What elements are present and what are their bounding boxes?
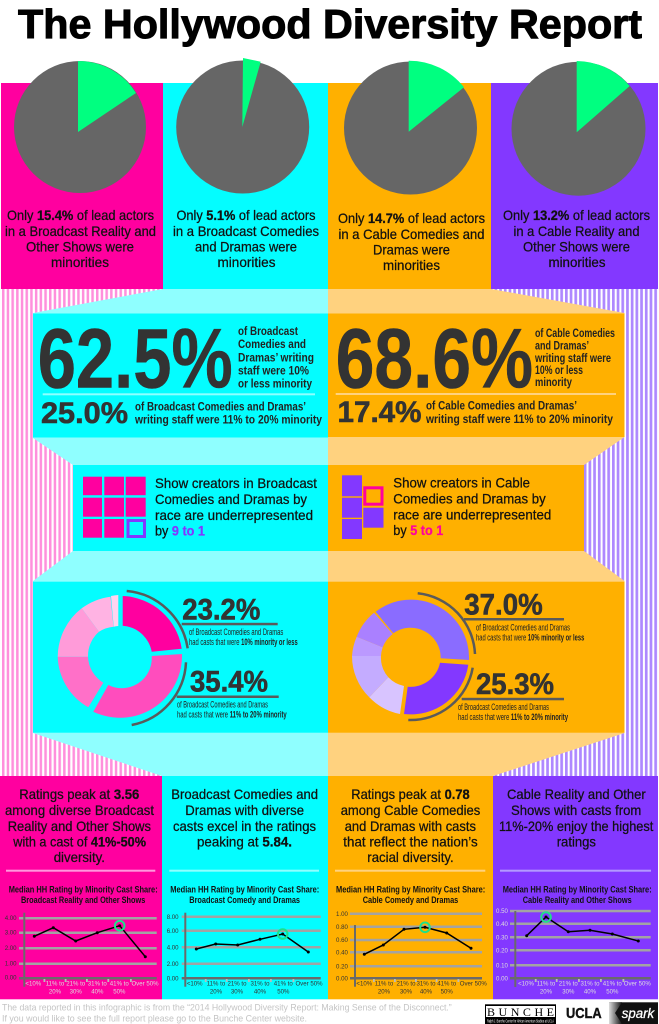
line chart: broadcast reality: 11% to: [46, 980, 65, 988]
text: 68.6% description: minority: [535, 375, 572, 389]
text: ratings summary: Ratings peak at 3.56: [19, 787, 140, 802]
chart title: [336, 884, 485, 905]
panel: Broadcast show creators: [73, 465, 328, 551]
chart title: [9, 884, 158, 905]
line chart: cable reality: 0.20: [496, 948, 508, 954]
text: 62.5% description: [238, 324, 314, 390]
line chart: cable reality: 30%: [562, 988, 575, 996]
striped background: pink: [2, 289, 163, 776]
text: ratings summary: Reality and Other Shows: [8, 819, 151, 834]
line chart: broadcast comedy: 4.00: [167, 944, 179, 952]
line chart: cable comedy: 0.20: [336, 964, 348, 970]
chart title: [170, 884, 319, 905]
line chart: broadcast comedy: 2.00: [167, 961, 179, 968]
text: ratings summary: [5, 787, 154, 865]
title: The Hollywood Diversity Report: [18, 1, 642, 47]
text: ratings summary: Cable Reality and Other: [507, 787, 646, 802]
text: ratings summary: racial diversity.: [367, 850, 454, 865]
line chart: cable comedy: <10%: [356, 980, 373, 988]
text: 17.4% description: writing staff were 11% to 20% minority: [425, 412, 613, 426]
text: 15.4%: Other Shows were: [26, 240, 134, 254]
stat: 17.4%: 17.4%: [338, 396, 422, 429]
text: 13.2%: [503, 208, 650, 270]
line chart: broadcast reality: 21% to: [66, 980, 86, 988]
text: show creators broadcast: Show creators in Broadcast: [155, 476, 317, 491]
text: 62.5% description: staff were 10%: [238, 363, 309, 377]
text: ratings summary: peaking at 5.84.: [197, 834, 292, 850]
text: 17.4% description: [425, 399, 613, 426]
line chart: broadcast reality: 4.00: [5, 915, 17, 922]
stat: 62.5%: 62.5%: [38, 312, 233, 406]
stat: 35.4%: [177, 666, 287, 720]
logo: Spark: spark: [622, 1005, 655, 1021]
text: ratings summary: ratings: [557, 834, 596, 850]
chart title: Broadcast Comedy and Dramas: [189, 895, 300, 905]
line chart: broadcast comedy: 50%: [277, 988, 290, 996]
line chart: cable reality: 0.30: [496, 934, 508, 942]
line chart: cable comedy: 0.80: [336, 924, 348, 931]
panel: ratings Cable Comedies: [328, 776, 493, 999]
text: 14.7%: in a Cable Comedies and: [338, 227, 484, 242]
panel: Broadcast casts: [33, 582, 328, 733]
chart title: Cable Comedy and Dramas: [363, 895, 458, 905]
text: 62.5% description: or less minority: [238, 376, 312, 390]
text: 13.2%: minorities: [548, 255, 606, 270]
text: 25.0% description: [134, 400, 322, 426]
connector band: orange: [328, 289, 624, 776]
line chart: cable comedy: 11% to: [375, 980, 394, 988]
line chart: cable comedy: 40%: [420, 988, 433, 996]
line chart: cable reality: Over 50%: [624, 980, 651, 988]
line chart: cable comedy: 1.00: [336, 911, 348, 918]
text: 25.0% description: of Broadcast Comedies and Dramas’: [135, 400, 306, 414]
text: show creators cable: Show creators in Cable: [393, 476, 530, 490]
panel: Cable casts: [328, 582, 624, 733]
panel: Cable show creators: [328, 465, 584, 551]
line chart: cable reality: 0.00: [496, 976, 508, 982]
text: 14.7%: Only 14.7% of lead actors: [338, 211, 485, 226]
line chart: broadcast comedy: 30%: [231, 988, 244, 996]
line chart: cable reality: 50%: [606, 988, 619, 996]
text: 5.1%: in a Broadcast Comedies: [173, 224, 319, 239]
panel: ratings Broadcast Reality: [0, 776, 162, 999]
line chart: cable reality: 31% to: [581, 980, 600, 988]
line chart: cable comedy: 50%: [441, 988, 453, 996]
text: 13.2%: in a Cable Reality and: [514, 224, 640, 239]
text: 15.4%: minorities: [51, 255, 109, 270]
panel: Broadcast Comedies lead actors: [163, 58, 328, 289]
text: ratings summary: [341, 787, 480, 865]
line chart: broadcast reality: 0.00: [5, 974, 17, 982]
text: ratings summary: among Cable Comedies: [341, 803, 480, 818]
chart title: Broadcast Reality and Other Shows: [21, 895, 145, 905]
line chart: broadcast reality: 31% to: [88, 980, 107, 988]
text: show creators cable: by 5 to 1: [393, 523, 444, 538]
line chart: cable comedy: Over 50%: [460, 980, 487, 988]
stat: 37.0%: [464, 588, 584, 642]
chart title: Cable Reality and Other Shows: [523, 895, 632, 905]
pie chart: 5.1%: [176, 58, 309, 194]
panel: Broadcast Reality lead actors: [1, 61, 163, 289]
text: 25.0% description: writing staff were 11% to 20% minority: [134, 412, 322, 426]
stat: 25.3%: 25.3%: [476, 668, 554, 701]
text: show creators cable: race are underrepresented: [393, 508, 551, 522]
text: 62.5% description: Dramas’ writing: [238, 350, 314, 364]
panel: Cable Reality lead actors: [491, 61, 658, 289]
line chart: cable comedy: 41% to: [437, 980, 457, 988]
line chart: broadcast reality: 2.00: [5, 945, 17, 952]
logo: UCLA: UCLA: [566, 1005, 602, 1022]
logo: Spark: [609, 1002, 658, 1024]
panel: Broadcast writing staff: [33, 312, 328, 438]
line chart: cable reality: 11% to: [537, 980, 556, 988]
line chart: cable reality: [496, 908, 651, 996]
line chart: cable comedy: 20%: [378, 988, 391, 996]
text: 13.2%: Only 13.2% of lead actors: [503, 208, 650, 223]
text: ratings summary: casts excel in the ratings: [173, 819, 316, 834]
text: 14.7%: [338, 211, 485, 273]
stat: 25.3%: [458, 668, 568, 722]
chart title: Median HH Rating by Minority Cast Share:: [170, 884, 319, 894]
line chart: broadcast reality: 20%: [49, 988, 62, 996]
text: show creators broadcast: Comedies and Dramas by: [155, 492, 307, 507]
chart title: Median HH Rating by Minority Cast Share:: [336, 884, 485, 894]
text: 5.1%: Only 5.1% of lead actors: [176, 208, 316, 223]
pie chart: 15.4%: [14, 61, 146, 193]
text: 68.6% description: and Dramas’: [535, 338, 589, 352]
stat: 37.0%: 37.0%: [464, 588, 543, 621]
text: show creators broadcast: race are underrepresented: [155, 508, 313, 523]
text: 62.5% description: of Broadcast: [238, 324, 298, 338]
panel: Cable Comedies lead actors: [328, 61, 491, 289]
line chart: broadcast comedy: <10%: [187, 980, 203, 988]
line chart: cable reality: 21% to: [559, 980, 578, 988]
text: 68.6% description: writing staff were: [534, 351, 611, 365]
line chart: cable reality: <10%: [518, 980, 534, 988]
chart title: [503, 884, 652, 905]
panel: Cable writing staff: [328, 312, 624, 437]
stat: 37.0%: had casts that were 10% minority or less: [476, 632, 584, 642]
striped background: purple: [491, 289, 658, 776]
stat: 25.3%: had casts that were 11% to 20% minority: [458, 712, 568, 722]
line chart: cable comedy: 0.40: [336, 950, 348, 956]
text: 5.1%: minorities: [218, 255, 276, 270]
line chart: broadcast reality: 1.00: [5, 960, 17, 968]
text: ratings summary: [171, 787, 318, 850]
line chart: broadcast reality: Over 50%: [131, 980, 159, 988]
text: show creators broadcast: by 9 to 1: [155, 524, 205, 538]
icon: 5 to 1 squares: [342, 475, 384, 539]
text: ratings summary: Dramas with diverse: [185, 803, 304, 818]
line chart: broadcast comedy: 8.00: [167, 914, 179, 921]
line chart: broadcast comedy: 0.00: [167, 976, 179, 982]
text: ratings summary: and Dramas with casts: [345, 819, 476, 834]
text: 13.2%: Other Shows were: [523, 240, 630, 254]
text: show creators cable: [393, 476, 551, 538]
text: 68.6% description: 10% or less: [535, 363, 583, 377]
line chart: cable reality: 41% to: [603, 980, 622, 988]
logo: Bunche: [485, 1004, 556, 1024]
text: 62.5% description: Comedies and: [238, 337, 306, 351]
text: 15.4%: [5, 208, 156, 270]
text: ratings summary: with a cast of 41%-50%: [12, 834, 146, 850]
stat: 23.2%: [182, 593, 298, 647]
pie chart: 14.7%: [344, 61, 477, 194]
line chart: broadcast reality: 30%: [70, 988, 82, 996]
pie chart: 13.2%: [512, 61, 646, 196]
stat: 23.2%: had casts that were 10% minority or less: [189, 637, 298, 647]
line chart: broadcast comedy: 20%: [210, 988, 223, 996]
text: 5.1%: and Dramas were: [195, 240, 297, 254]
donut chart: broadcast: [58, 591, 188, 725]
line chart: broadcast reality: 41% to: [110, 980, 129, 988]
connector band: cyan: [33, 289, 328, 776]
text: 68.6% description: [534, 326, 615, 389]
text: 14.7%: minorities: [383, 258, 440, 273]
stat: 35.4%: 35.4%: [190, 666, 268, 699]
line chart: broadcast reality: 3.00: [5, 930, 17, 936]
stat: 23.2%: of Broadcast Comedies and Dramas: [189, 627, 284, 637]
line chart: cable reality: 0.50: [496, 908, 508, 915]
line chart: cable comedy: 0.00: [336, 976, 348, 982]
line chart: broadcast comedy: 31% to: [251, 980, 270, 988]
line chart: cable comedy: 31% to: [417, 980, 436, 988]
stat: 25.0%: 25.0%: [41, 397, 128, 430]
text: ratings summary: among diverse Broadcast: [5, 803, 154, 818]
logo: Bunche: BUNCHE: [487, 1005, 554, 1019]
text: ratings summary: that reflect the nation’s: [343, 834, 478, 850]
text: ratings summary: Ratings peak at 0.78: [351, 787, 470, 802]
text: ratings summary: Shows with casts from: [511, 803, 641, 818]
text: ratings summary: Broadcast Comedies and: [171, 787, 318, 802]
stat: 68.6%: 68.6%: [336, 312, 533, 406]
line chart: cable reality: 40%: [584, 988, 597, 996]
text: ratings summary: [499, 787, 654, 850]
text: 15.4%: in a Broadcast Reality and: [5, 224, 156, 239]
text: 14.7%: Dramas were: [373, 242, 450, 258]
donut chart: cable: [352, 593, 475, 720]
text: 5.1%: [173, 208, 319, 270]
text: ratings summary: diversity.: [54, 850, 105, 865]
line chart: cable comedy: 30%: [400, 988, 413, 996]
text: 17.4% description: of Cable Comedies and Dramas’: [426, 399, 577, 413]
line chart: broadcast comedy: 11% to: [207, 980, 226, 988]
line chart: broadcast reality: [5, 913, 159, 996]
line chart: cable comedy: 21% to: [397, 980, 416, 988]
line chart: broadcast comedy: [167, 913, 323, 996]
line chart: cable reality: 0.40: [496, 921, 508, 928]
panel: ratings Cable Reality: [493, 776, 658, 999]
stat: 35.4%: of Broadcast Comedies and Dramas: [177, 700, 268, 710]
footer source text: The data reported in this infographic is from the “2014 Hollywood Diversity Report: Making Sense of the Disconnect.”: [2, 1002, 452, 1014]
footer source text: [2, 1002, 452, 1024]
line chart: broadcast comedy: 41% to: [274, 980, 293, 988]
line chart: broadcast comedy: 21% to: [228, 980, 247, 988]
line chart: cable reality: 0.10: [496, 962, 508, 970]
text: show creators cable: Comedies and Dramas by: [393, 492, 546, 506]
stat: 37.0%: of Broadcast Comedies and Dramas: [476, 622, 570, 632]
line chart: cable comedy: 0.60: [336, 937, 348, 944]
chart title: Median HH Rating by Minority Cast Share:: [9, 884, 158, 894]
logo: Bunche: Ralph J. Bunche Center for African American Studies at UCLA: [487, 1018, 554, 1024]
line chart: broadcast reality: <10%: [25, 980, 42, 988]
line chart: cable comedy: [336, 911, 487, 996]
line chart: cable reality: 20%: [540, 988, 553, 996]
line chart: broadcast comedy: 6.00: [167, 928, 179, 935]
stat: 25.3%: of Broadcast Comedies and Dramas: [458, 702, 549, 712]
line chart: broadcast reality: 40%: [91, 988, 104, 996]
panel: ratings Broadcast Comedies: [162, 776, 328, 999]
stat: 23.2%: 23.2%: [182, 593, 260, 626]
line chart: broadcast comedy: Over 50%: [295, 980, 323, 988]
line chart: broadcast reality: 50%: [113, 988, 126, 996]
text: show creators broadcast: [155, 476, 317, 538]
text: 15.4%: Only 15.4% of lead actors: [7, 208, 154, 223]
stat: 35.4%: had casts that were 11% to 20% minority: [177, 710, 287, 720]
line chart: broadcast comedy: 40%: [254, 988, 267, 996]
text: ratings summary: 11%-20% enjoy the highest: [499, 819, 654, 834]
text: 68.6% description: of Cable Comedies: [535, 326, 615, 340]
icon: 9 to 1 squares: [83, 477, 146, 538]
